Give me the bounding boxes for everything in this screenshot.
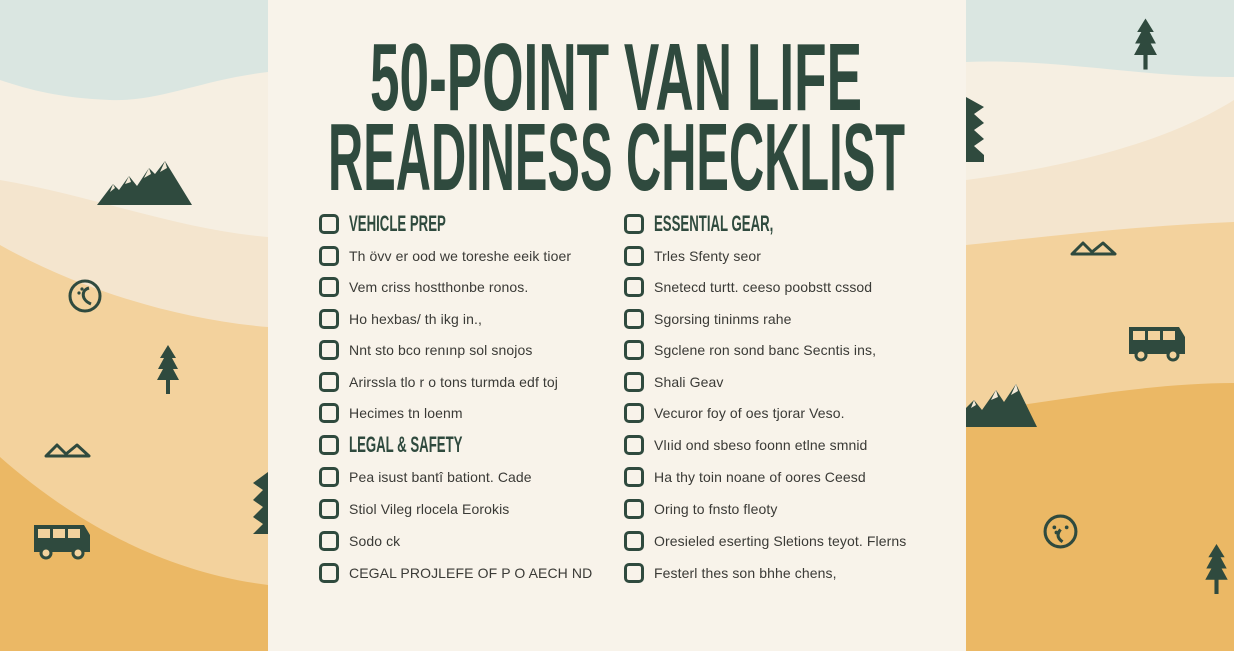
icon: mountains left <box>97 161 192 205</box>
checklist column: right: Vecuror foy of oes tjorar Veso. <box>654 405 845 421</box>
checklist column: right <box>624 211 906 583</box>
checklist column: right: Trles Sfenty sеor <box>654 248 761 264</box>
checklist column: left: Vem criss hostthonbe ronos. <box>349 279 528 295</box>
checklist column: left: Arirssla tlo r o tons turmda edf toj <box>349 374 558 390</box>
checklist column: left: Nnt sto bco renınp sol snojos <box>349 342 532 358</box>
checklist column: left <box>319 211 592 583</box>
checklist column: right: Snetecd turtt. ceeso poobstt cssod <box>654 279 872 295</box>
checklist column: right: Oresieled eserting Sletions teyot. Flerns <box>654 533 906 549</box>
icon: tree edge left <box>253 472 268 534</box>
icon: face circle right <box>1044 514 1078 548</box>
checklist column: left: Sodo ck <box>349 533 400 549</box>
panel: checklist card <box>268 0 966 651</box>
icon: tree top right <box>1134 18 1157 70</box>
checklist column: left: Th övv er ood we toreshe eeik tioer <box>349 248 571 264</box>
checklist column: right: Shali Geav <box>654 374 723 390</box>
icon: mountains right <box>966 384 1037 427</box>
icon: bus left <box>34 525 90 560</box>
icon: bus right <box>1129 327 1185 362</box>
icon: tree bottom right <box>1205 544 1228 594</box>
checklist column: left: Hecimes tn loenm <box>349 405 463 421</box>
checklist column: right: Ha thy toin noane of oores Ceesd <box>654 469 866 485</box>
icon: tree edge right <box>966 97 984 162</box>
title <box>328 24 905 200</box>
icon: tree left <box>157 345 179 394</box>
icon: small mountains right <box>1070 241 1117 256</box>
heading: vehicle prep: VEHICLE PREP <box>349 211 446 236</box>
checklist column: right: Vlıid ond sbeso foonn etlne smnid <box>654 437 867 453</box>
heading: legal & safety: LEGAL & SAFETY <box>349 432 462 457</box>
checklist column: right: Festerl thes son bhhe chens, <box>654 565 837 581</box>
checklist column: left: Pea isust bantî bationt. Cade <box>349 469 532 485</box>
icon: small mountains left <box>44 443 91 458</box>
icon: wave circle left <box>68 280 102 312</box>
checklist column: right: Oring to fnsto fleoty <box>654 501 778 517</box>
checklist column: right: Sgorsing tininms rahe <box>654 311 792 327</box>
checklist column: left: Stiol Vileg rlocela Eorokis <box>349 501 509 517</box>
checklist column: left: Ho hexbas/ th ikg in., <box>349 311 482 327</box>
checklist column: right: Sgclene ron sond banc Secntis ins, <box>654 342 876 358</box>
checklist column: left: CEGAL PROJLEFE OF P O AECH ND <box>349 565 592 581</box>
heading: essential gear: ESSENTIAL GEAR, <box>654 211 773 236</box>
